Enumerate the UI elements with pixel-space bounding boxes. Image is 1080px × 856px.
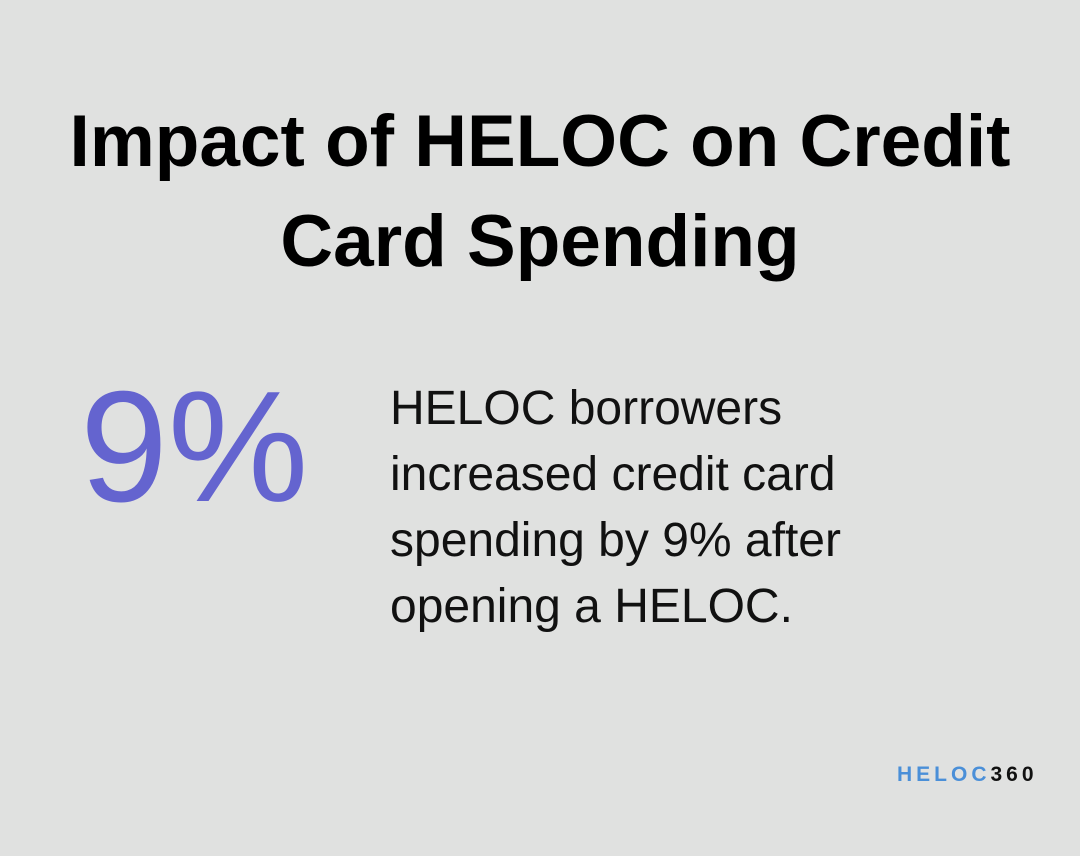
stat number: 9% [80,359,308,535]
title: Card Spending [280,201,800,282]
description text: opening a HELOC. [390,580,793,633]
description text [390,382,841,633]
description text: increased credit card [390,448,836,501]
logo: HELOC360 [897,763,1038,786]
description text: spending by 9% after [390,514,841,567]
title [70,101,1010,282]
title: Impact of HELOC on Credit [70,101,1010,182]
description text: HELOC borrowers [390,382,782,435]
